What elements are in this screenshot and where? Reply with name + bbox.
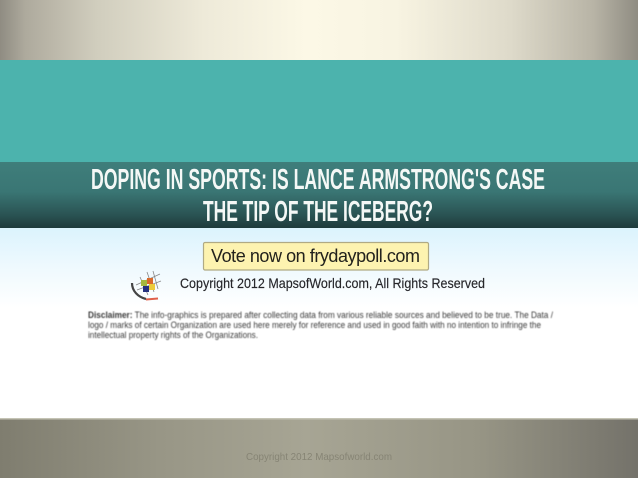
copyright line: Copyright 2012 MapsofWorld.com, All Rights Reserved: [180, 275, 485, 291]
disclaimer: [88, 310, 553, 340]
disclaimer: intellectual property rights of the Organizations.: [88, 330, 258, 340]
title text: [91, 164, 545, 228]
vote text: Vote now on frydaypoll.com: [211, 246, 420, 266]
disclaimer: Disclaimer: The info-graphics is prepared after collecting data from various reliable sources and believed to be true. The Data /: [88, 310, 553, 320]
vote button: [204, 242, 428, 270]
title banner: [0, 162, 638, 228]
top beige band: [0, 0, 638, 60]
bottom band: [0, 418, 638, 478]
teal panel: [0, 60, 638, 162]
footer text: Copyright 2012 Mapsofworld.com: [246, 451, 392, 463]
title text: THE TIP OF THE ICEBERG?: [203, 196, 433, 228]
icon: MapsofWorld logo: [132, 271, 161, 300]
white content panel: [0, 228, 638, 418]
disclaimer: logo / marks of certain Organization are used here merely for reference and used in good faith with no intention to infringe the: [88, 320, 541, 330]
